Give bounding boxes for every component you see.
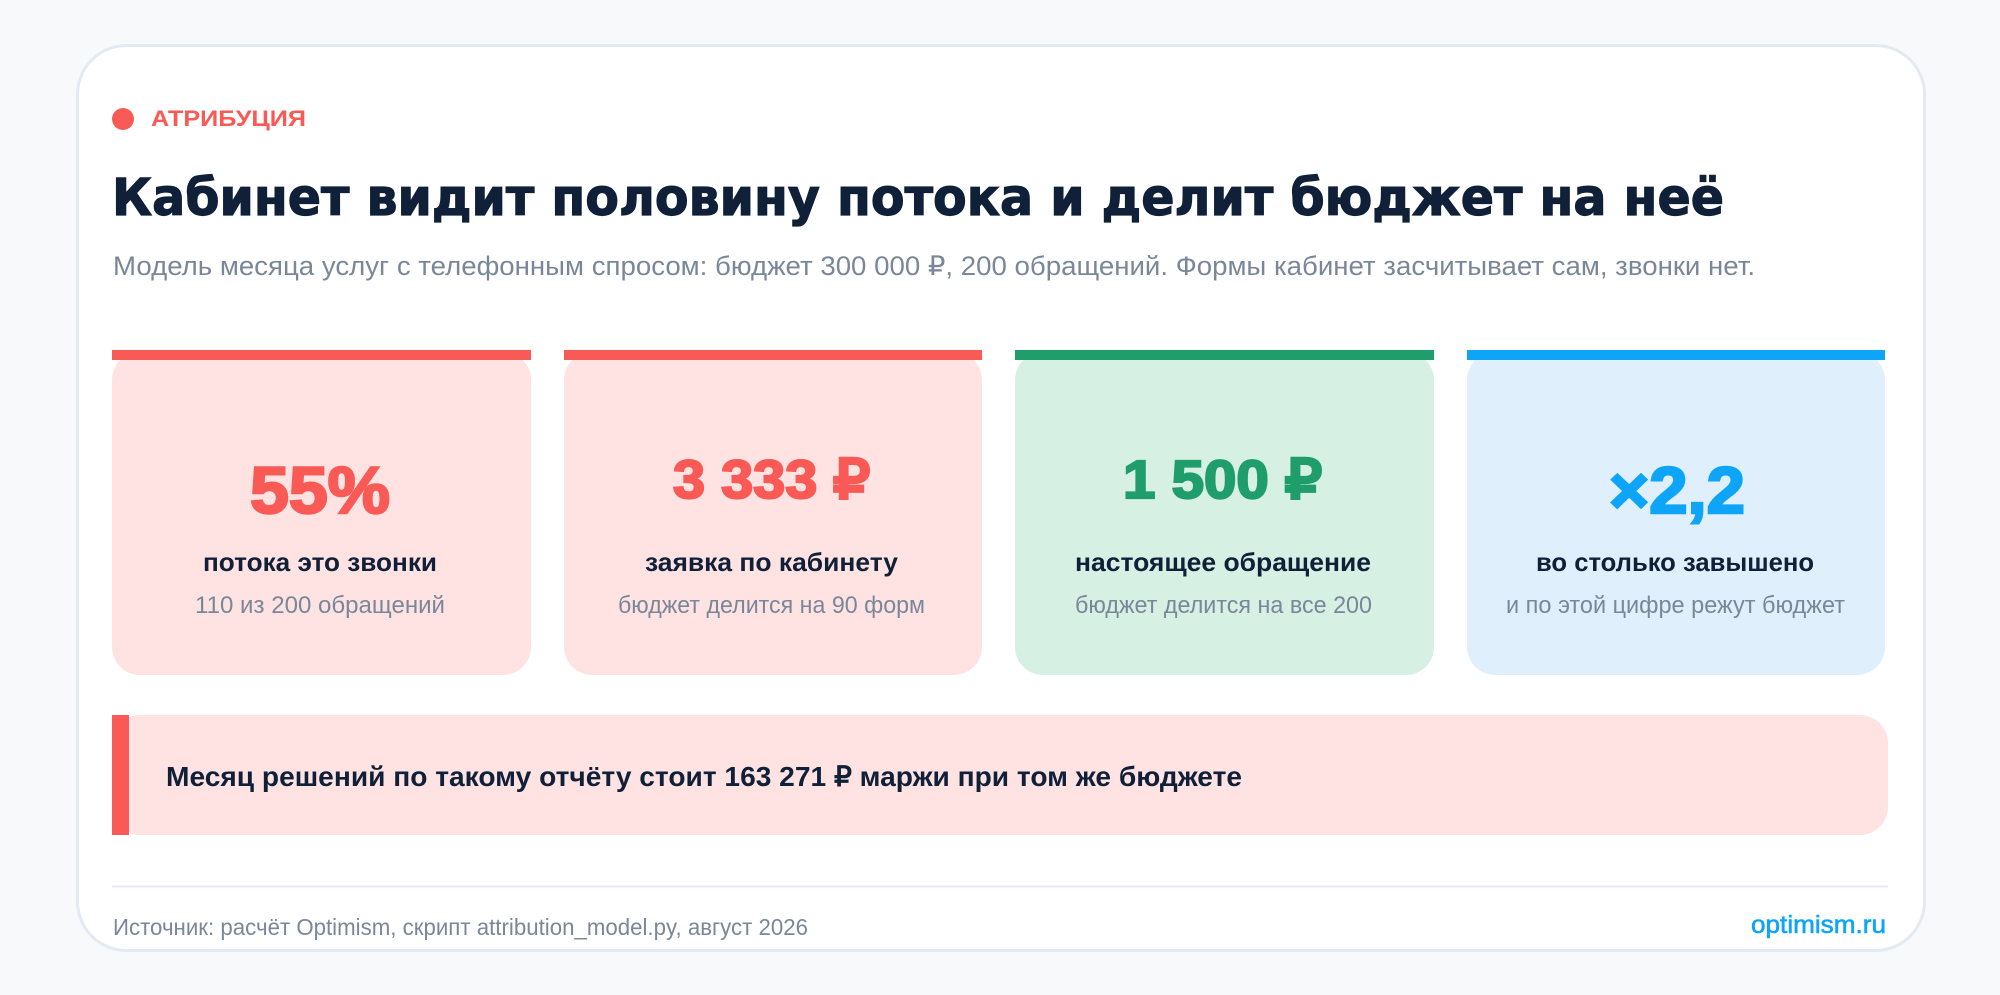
metric: 3 333 ₽: 3 333 ₽ [673,450,870,510]
callout text: Месяц решений по такому отчёту стоит 163 271 ₽ маржи при том же бюджете [166,761,1242,792]
source note: Источник: расчёт Optimism, скрипт attribution_model.py, август 2026 [113,914,808,940]
metric: ×2,2: ×2,2 [1609,453,1745,527]
callout [112,715,1888,835]
metric: 55%: 55% [250,453,390,527]
subtitle: Модель месяца услуг с телефонным спросом: бюджет 300 000 ₽, 200 обращений. Формы кабинет засчитывает сам, звонки нет. [113,251,1755,281]
label: заявка по кабинету [645,547,899,577]
brand link: optimism.ru [1751,911,1886,939]
note: и по этой цифре режут бюджет [1506,592,1845,619]
eyebrow: attribution tag [112,106,306,131]
note: бюджет делится на 90 форм [618,592,925,619]
panel: real lead cost [1015,350,1434,675]
panel: overstatement [1467,350,1885,675]
label: настоящее обращение [1075,547,1371,577]
icon: red dot [112,108,134,130]
panel: calls share [112,350,531,675]
eyebrow text: АТРИБУЦИЯ [151,106,306,131]
note: 110 из 200 обращений [195,592,445,619]
label: потока это звонки [203,547,437,577]
title: Кабинет видит половину потока и делит бюджет на неё [112,169,1724,228]
metric: 1 500 ₽: 1 500 ₽ [1123,450,1322,510]
note: бюджет делится на все 200 [1075,592,1372,619]
panel: cabinet lead cost [564,350,982,675]
label: во столько завышено [1536,547,1814,577]
